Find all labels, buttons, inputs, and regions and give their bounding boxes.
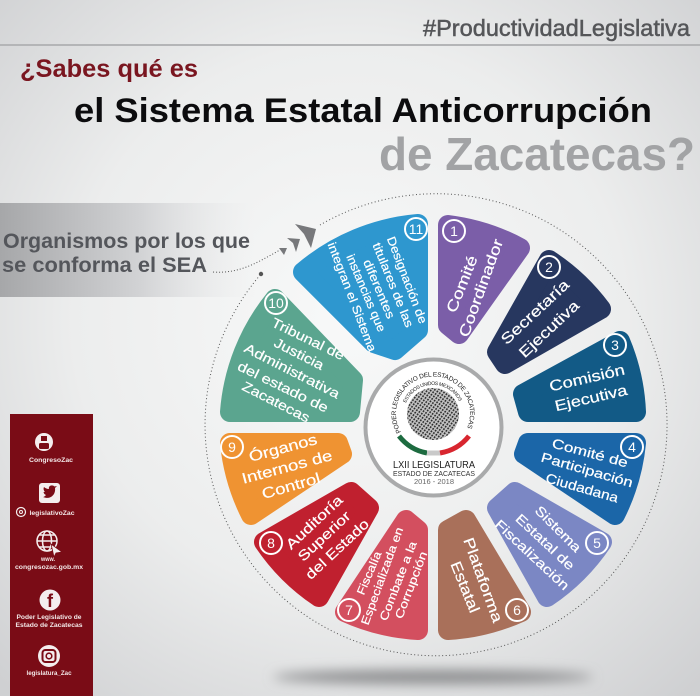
wedge 7: Fiscalía Especializada: Corrupción — [394, 550, 430, 621]
wedge 6: Plataforma Estatal: Estatal — [447, 559, 483, 615]
wedge 6: Plataforma Estatal: 6 — [513, 602, 521, 618]
wedge 11: Designación de titulares: instancias que — [343, 252, 389, 334]
label: Poder Legislativo: Poder Legislativo de — [16, 615, 82, 621]
arrow triangles — [279, 224, 316, 255]
wedge 2: Secretaría Ejecutiva: Secretaría — [498, 276, 574, 348]
wedge 1: Comité Coordinador: Coordinador — [456, 237, 507, 339]
label: legislativoZac — [16, 508, 75, 517]
wedge 4: Comité de Participación Ciudadana: Ciudadana — [544, 470, 621, 506]
heading: question intro: ¿Sabes qué es — [20, 55, 198, 83]
wedge 10: Tribunal de Justicia Administrativa: Administrativa — [242, 340, 343, 402]
wedge 7: Fiscalía Especializada: 7 — [345, 602, 353, 618]
dotted connector from subtitle to arrows — [213, 250, 280, 272]
dotted ring around wheel — [205, 194, 667, 656]
wedge 10: Tribunal de Justicia Administrativa: Tribunal de — [269, 315, 347, 363]
wedge 5: Sistema Estatal de Fiscalización — [492, 492, 608, 597]
wedge 5: Sistema Estatal de Fiscalización: Estatal de — [512, 511, 578, 573]
subtitle text: se conforma el SEA — [2, 254, 207, 277]
wedge 9: Órganos Internos de Control: Órganos — [247, 431, 319, 466]
seal tricolor arcs — [399, 436, 469, 453]
label: website — [15, 557, 84, 571]
icon: Facebook: f — [47, 591, 54, 611]
wedge 9: Órganos Internos de Control: Control — [260, 470, 322, 503]
wedge 7: Fiscalía Especializada: Fiscalía — [355, 549, 385, 597]
wedge 4: Comité de Participación Ciudadana — [524, 436, 643, 515]
icon: Instagram — [38, 645, 60, 667]
wedge 4: Comité de Participación Ciudadana: 4 — [628, 439, 636, 455]
heading: de Zacatecas: de Zacatecas? — [379, 128, 695, 180]
wedge 3: Comisión Ejecutiva: 3 — [611, 337, 619, 353]
legislature name: ESTADO DE ZACATECAS — [393, 469, 475, 478]
wedge 3: Comisión Ejecutiva: Comisión — [548, 362, 627, 395]
label: website: congresozac.gob.mx — [15, 565, 84, 571]
header rule — [0, 44, 700, 46]
wedge 2: Secretaría Ejecutiva: 2 — [545, 259, 553, 275]
panel: social media sidebar — [10, 414, 93, 696]
icon: globe with cursor — [37, 531, 62, 557]
seal lettering: PODER LEGISLATIVO DEL ESTADO DE ZACATECAS — [392, 372, 474, 434]
ring end dot — [259, 272, 263, 276]
wedge 9: Órganos Internos de Control: Internos de — [240, 447, 334, 488]
subtitle text — [2, 230, 250, 277]
wedge 10: Tribunal de Justicia Administrativa: del estado de — [235, 359, 331, 415]
panel: wheel of organisms — [221, 218, 643, 630]
label: CongresoZac: CongresoZac — [29, 458, 74, 464]
legislature name: 2016 - 2018 — [414, 477, 454, 486]
wedge 9: Órganos Internos de Control: 9 — [228, 439, 236, 455]
wedge 6: Plataforma Estatal — [447, 520, 528, 630]
wedge 3: Comisión Ejecutiva — [523, 334, 636, 415]
icon: Twitter — [39, 483, 60, 503]
seal eagle — [407, 388, 459, 440]
label: Poder Legislativo — [16, 615, 83, 629]
wedge 11: Designación de titulares: Designación de — [384, 235, 430, 326]
heading: main title: el Sistema Estatal Anticorrupción — [74, 92, 652, 130]
wedge 11: Designación de titulares: titulares de las — [370, 241, 416, 329]
icon: Facebook — [40, 590, 60, 611]
wedge 11: Designación de titulares — [303, 218, 430, 354]
wedge 10: Tribunal de Justicia Administrativa: Justicia — [272, 335, 327, 373]
subtitle band — [0, 203, 255, 297]
wedge 1: Comité Coordinador — [443, 220, 520, 339]
label: legislativoZac: legislativoZac — [30, 511, 75, 517]
label: website: www. — [40, 557, 55, 563]
wedge 8: Auditoría Superior del Estado — [260, 491, 372, 597]
wedge 9: Órganos Internos de Control — [221, 431, 342, 515]
wedge 7: Fiscalía Especializada: Combate a la — [378, 539, 420, 623]
wedge 7: Fiscalía Especializada — [338, 520, 430, 630]
legislature name — [393, 459, 475, 486]
wedge 1: Comité Coordinador: 1 — [450, 223, 458, 239]
wedge 3: Comisión Ejecutiva: Ejecutiva — [553, 382, 630, 415]
wedge 10: Tribunal de Justicia Administrativa: Zacatecas — [240, 379, 313, 426]
center logo — [364, 358, 504, 498]
wedge 8: Auditoría Superior del Estado: del Estado — [302, 515, 372, 582]
wedge 8: Auditoría Superior del Estado: Superior — [294, 507, 354, 564]
seal lettering: ESTADOS UNIDOS MEXICANOS — [403, 381, 462, 403]
wedge 2: Secretaría Ejecutiva — [497, 256, 601, 364]
wedge 4: Comité de Participación Ciudadana: Participación — [539, 450, 635, 490]
wedge 5: Sistema Estatal de Fiscalización: Sistema — [532, 503, 585, 556]
wedge 5: Sistema Estatal de Fiscalización: 5 — [593, 535, 601, 551]
wedge 4: Comité de Participación Ciudadana: Comité de — [550, 436, 630, 470]
wheel shadow — [273, 670, 593, 684]
wedge 8: Auditoría Superior del Estado: Auditoría — [282, 491, 346, 552]
subtitle text: Organismos por los que — [3, 230, 250, 253]
wedge 10: Tribunal de Justicia Administrativa: 10 — [268, 295, 284, 311]
wedge 5: Sistema Estatal de Fiscalización: Fiscalización — [492, 517, 572, 593]
legislature name: LXII LEGISLATURA — [393, 459, 475, 471]
wedge 7: Fiscalía Especializada: Especializada en — [360, 526, 406, 627]
wedge 8: Auditoría Superior del Estado: 8 — [267, 535, 275, 551]
label: Poder Legislativo: Estado de Zacatecas — [16, 623, 83, 629]
wedge 11: Designación de titulares: 11 — [409, 221, 423, 237]
wedge 10: Tribunal de Justicia Administrativa — [230, 292, 353, 426]
label: legislatura_Zac: legislatura_Zac — [26, 671, 72, 677]
wedge 11: Designación de titulares: diferentes — [360, 257, 398, 321]
hashtag: #ProductividadLegislativa — [423, 15, 690, 41]
wedge 1: Comité Coordinador: Comité — [443, 253, 482, 315]
wedge 11: Designación de titulares: integran el Sistema — [325, 240, 379, 354]
wedge 6: Plataforma Estatal: Plataforma — [459, 535, 506, 626]
wedge 2: Secretaría Ejecutiva: Ejecutiva — [516, 297, 584, 361]
icon: YouTube — [35, 433, 53, 451]
